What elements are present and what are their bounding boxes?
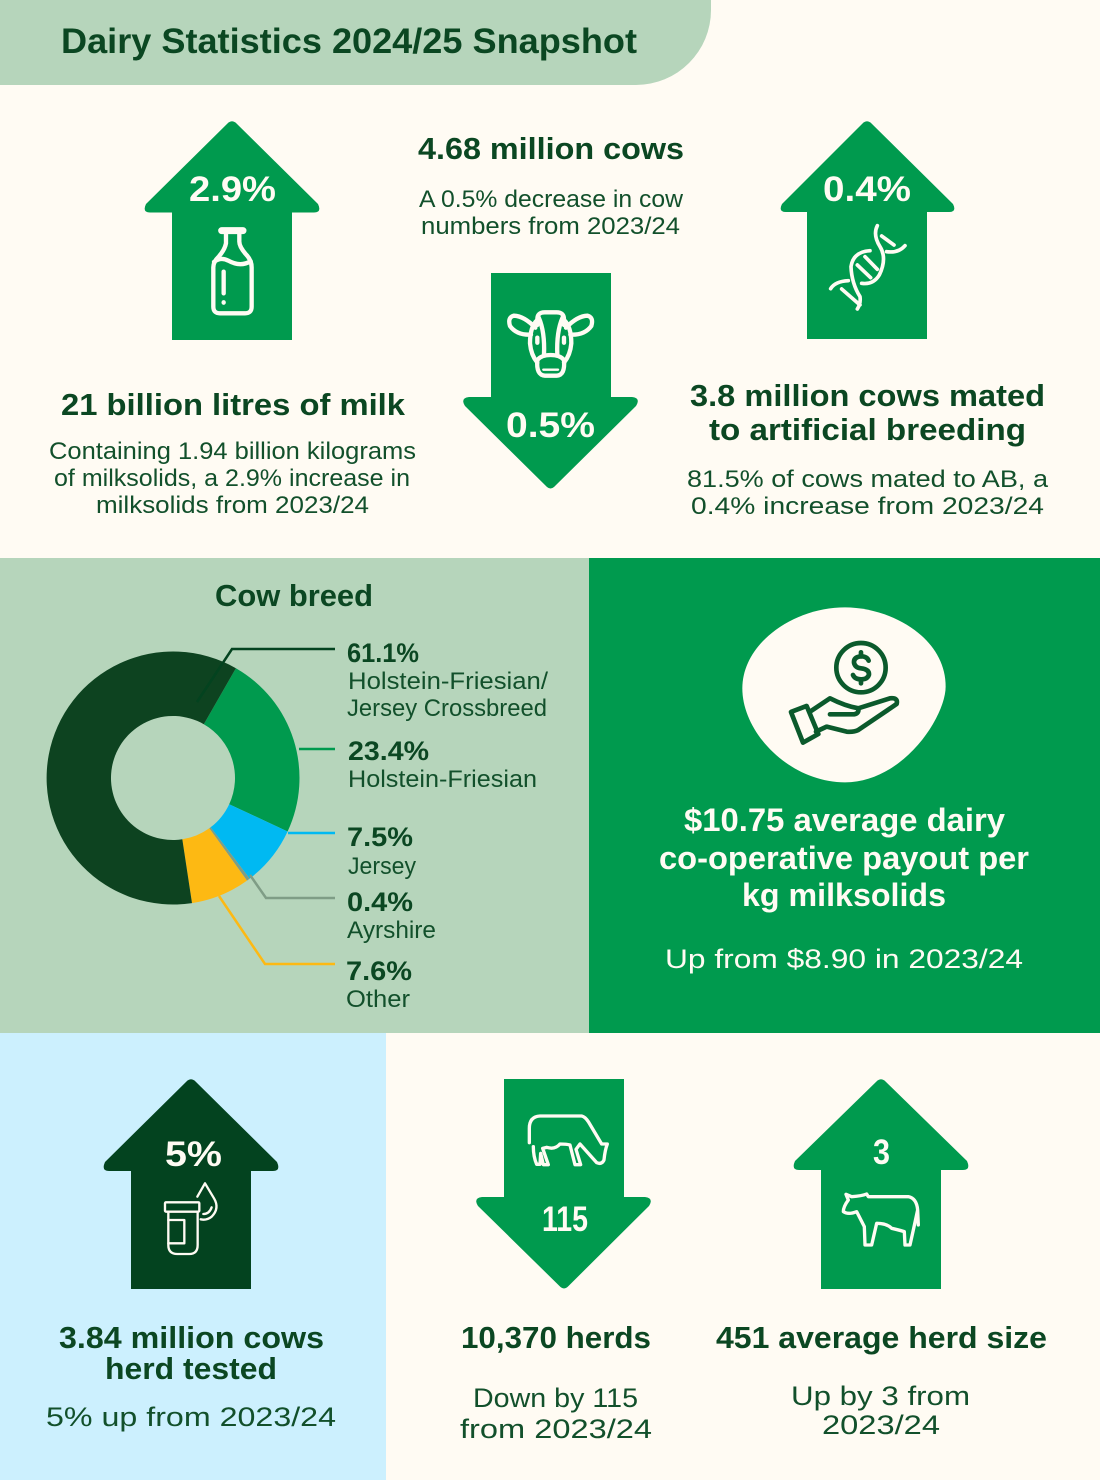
- legend: jersey: Jersey: [348, 853, 416, 880]
- legend: crossbreed: 61.1%: [347, 638, 419, 668]
- text: payout comparison: Up from $8.90 in 2023/24: [665, 944, 1023, 974]
- up arrow: artificial breeding 0.4%: [781, 121, 954, 339]
- text: cow numbers: A 0.5% decrease in cow: [419, 186, 684, 213]
- text: payout headline: $10.75 average dairy: [684, 802, 1005, 838]
- panel: herd testing: [0, 1033, 386, 1480]
- leader lines: [197, 649, 335, 964]
- text: herds: [460, 1320, 652, 1444]
- text: herd tested: herd tested: [105, 1351, 277, 1386]
- text: payout headline: kg milksolids: [742, 877, 946, 913]
- legend: ayrshire: Ayrshire: [347, 917, 436, 944]
- legend: ayrshire: 0.4%: [347, 887, 413, 917]
- text: artificial breeding: 81.5% of cows mated to AB, a: [687, 466, 1049, 493]
- text: herd size: Up by 3 from: [791, 1381, 970, 1411]
- text: herds: from 2023/24: [460, 1414, 652, 1444]
- text: artificial breeding: to artificial breeding: [709, 412, 1026, 447]
- legend: jersey: 7.5%: [347, 822, 413, 852]
- legend: other: [346, 956, 412, 1013]
- title banner: Dairy Statistics 2024/25 Snapshot: [61, 22, 637, 61]
- panel: cow breed: [0, 558, 589, 1033]
- text: herd size: 2023/24: [822, 1410, 940, 1440]
- text: litres of milk: of milksolids, a 2.9% increase in: [54, 465, 410, 492]
- text: herd tested: [46, 1320, 336, 1432]
- legend: holstein-friesian: 23.4%: [348, 736, 429, 766]
- up arrow: artificial breeding 0.4%: 0.4%: [823, 170, 911, 209]
- down arrow: herds 115: [476, 1079, 651, 1288]
- text: litres of milk: Containing 1.94 billion kilograms: [49, 438, 416, 465]
- icon: grazing cow: [529, 1116, 607, 1165]
- icon: sample jar and drop: [165, 1183, 216, 1254]
- text: cow numbers: [418, 131, 684, 240]
- text: herd size: 451 average herd size: [716, 1320, 1047, 1355]
- up arrow: herd size 3: 3: [873, 1133, 890, 1172]
- text: payout headline: [659, 802, 1029, 913]
- panel: payout: [589, 558, 1100, 1033]
- icon: hand holding coin: [742, 607, 946, 782]
- text: litres of milk: milksolids from 2023/24: [96, 492, 369, 519]
- text: herd tested: 3.84 million cows: [59, 1320, 324, 1355]
- icon: DNA helix: [831, 226, 905, 309]
- heading: cow breed: Cow breed: [215, 578, 373, 613]
- text: cow numbers: 4.68 million cows: [418, 131, 684, 166]
- legend: crossbreed: [347, 638, 548, 722]
- text: artificial breeding: 0.4% increase from 2023/24: [691, 493, 1044, 520]
- up arrow: milk 2.9%: [145, 121, 319, 340]
- down arrow: cows 0.5%: [463, 273, 638, 488]
- donut chart: [47, 652, 299, 905]
- legend: other: 7.6%: [346, 956, 412, 986]
- up arrow: herd tested 5%: 5%: [165, 1135, 222, 1174]
- up arrow: milk 2.9%: 2.9%: [189, 170, 276, 209]
- text: litres of milk: [49, 387, 416, 519]
- text: herd size: [716, 1320, 1047, 1440]
- text: herds: 10,370 herds: [461, 1320, 651, 1355]
- up arrow: herd tested 5%: [104, 1079, 278, 1289]
- text: artificial breeding: [687, 378, 1049, 520]
- down arrow: cows 0.5%: 0.5%: [506, 406, 595, 445]
- text: payout headline: co-operative payout per: [659, 840, 1029, 876]
- title banner: [0, 0, 711, 85]
- legend: jersey: [347, 822, 416, 880]
- legend: holstein-friesian: [348, 736, 537, 793]
- text: herds: Down by 115: [473, 1383, 638, 1413]
- up arrow: herd size 3: [794, 1079, 968, 1289]
- legend: crossbreed: Jersey Crossbreed: [347, 695, 547, 722]
- text: litres of milk: 21 billion litres of milk: [61, 387, 406, 422]
- legend: ayrshire: [347, 887, 436, 944]
- legend: holstein-friesian: Holstein-Friesian: [348, 766, 537, 793]
- legend: other: Other: [346, 986, 410, 1013]
- icon: standing cow: [843, 1194, 918, 1245]
- text: cow numbers: numbers from 2023/24: [421, 213, 680, 240]
- icon: milk bottle: [213, 229, 252, 313]
- down arrow: herds 115: 115: [542, 1200, 588, 1239]
- text: herd tested: 5% up from 2023/24: [46, 1402, 336, 1432]
- icon: cow face: [509, 312, 592, 376]
- text: artificial breeding: 3.8 million cows mated: [690, 378, 1045, 413]
- legend: crossbreed: Holstein-Friesian/: [348, 668, 548, 695]
